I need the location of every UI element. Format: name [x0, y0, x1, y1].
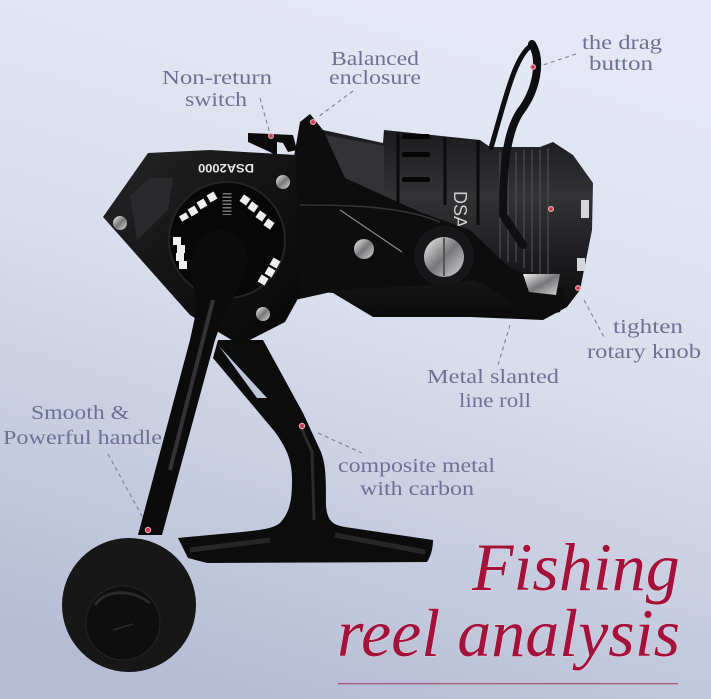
rotor arm [290, 114, 565, 318]
non-return switch [248, 133, 297, 156]
callout: metal slanted line roll: line roll [459, 390, 532, 412]
spool and rotor [300, 130, 593, 320]
callout: smooth and powerful handle [3, 402, 162, 533]
gear checker squares [173, 192, 280, 285]
spool line grooves [500, 148, 548, 280]
spool brand text: DSA [450, 191, 470, 228]
title: Fishing [471, 529, 680, 605]
handle arm highlight [170, 300, 213, 470]
callout: the drag button: button [589, 53, 653, 75]
side screw [354, 239, 374, 259]
title [337, 529, 680, 671]
bail pivot [414, 226, 474, 286]
housing screws [113, 216, 127, 230]
callout: tighten rotary knob: rotary knob [587, 341, 701, 363]
callout: smooth and powerful handle: Smooth & [31, 402, 130, 424]
callout: balanced enclosure [311, 48, 421, 124]
callout: the drag button [531, 32, 662, 75]
slanted line roller [523, 274, 560, 295]
callout: non-return switch: switch [185, 89, 247, 111]
callout: composite metal with carbon: composite metal [338, 455, 496, 477]
gear housing [103, 150, 300, 345]
callout: metal slanted line roll: Metal slanted [427, 366, 559, 388]
title underline [338, 683, 678, 684]
callout: tighten rotary knob: tighten [613, 316, 683, 338]
rear skirt slots [402, 134, 430, 182]
front knob slots [577, 200, 589, 271]
callout: metal slanted line roll [427, 325, 559, 412]
spool marker [549, 207, 553, 211]
callout: tighten rotary knob [576, 286, 701, 363]
model number: DSA2000 [198, 161, 254, 173]
title: reel analysis [337, 595, 680, 671]
callout: balanced enclosure: enclosure [329, 67, 421, 89]
callout: balanced enclosure: Balanced [331, 48, 419, 70]
handle arm [138, 230, 248, 535]
rotor cup [325, 135, 384, 215]
gear ring [169, 182, 285, 298]
handle knob [62, 538, 196, 672]
callout: composite metal with carbon: with carbon [360, 478, 474, 500]
rear skirt ridges [398, 132, 478, 238]
fishing reel illustration [62, 44, 593, 672]
callout: non-return switch [162, 67, 273, 138]
callout: non-return switch: Non-return [162, 67, 272, 89]
callout: composite metal with carbon [299, 423, 496, 500]
callout: the drag button: the drag [582, 32, 662, 54]
bail arm [491, 44, 537, 245]
foot and stem [178, 340, 433, 563]
callout: smooth and powerful handle: Powerful handle [3, 427, 162, 449]
